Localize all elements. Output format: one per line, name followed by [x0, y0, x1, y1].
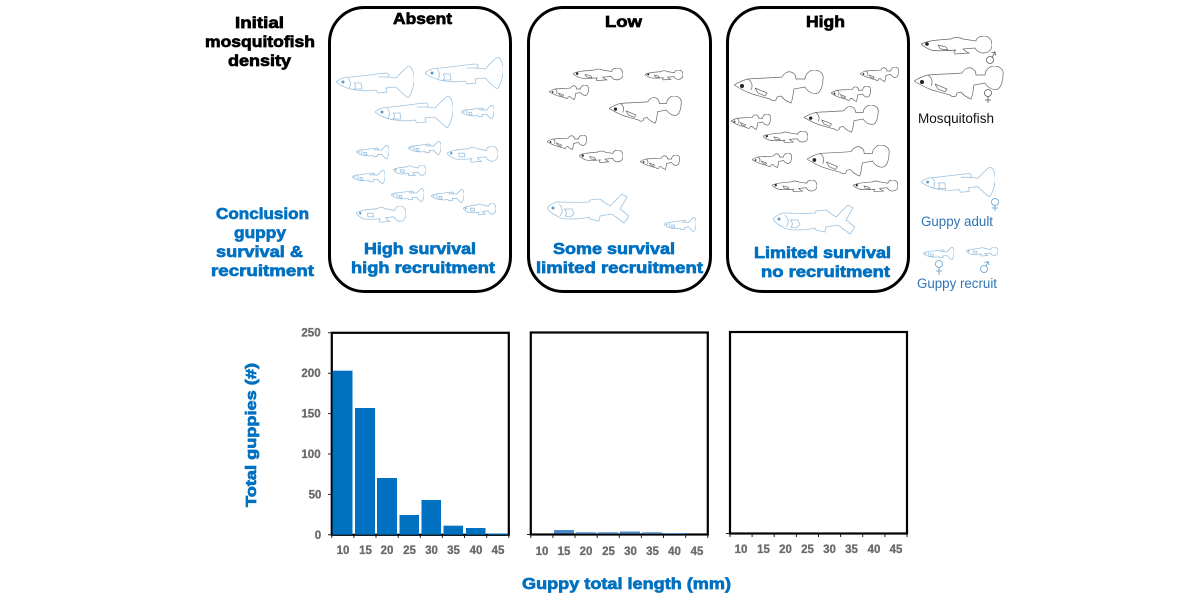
mosquitofish school: high [731, 67, 899, 192]
x labels: absent: 45 [492, 545, 505, 557]
x labels: absent: 40 [470, 545, 482, 557]
x labels: high: 45 [890, 544, 903, 556]
conclusion: limited survival: no recruitment [761, 264, 891, 281]
legend: mosquitofish [914, 36, 1003, 126]
panel title: Absent: Absent [393, 11, 453, 28]
mosquitofish school: low [547, 68, 683, 170]
bars: absent [332, 371, 508, 535]
conclusion: some survival [536, 241, 704, 277]
legend: guppy adult [921, 167, 998, 229]
y axis labels: 50 [309, 490, 321, 502]
guppy: high [773, 205, 855, 234]
x labels: high: 10 [735, 544, 747, 556]
y axis labels: 0 [315, 530, 321, 542]
conclusion: limited survival: Limited survival [754, 245, 891, 262]
axis ticks: high [726, 534, 907, 537]
legend: guppy recruit [917, 247, 998, 291]
x labels: high: 30 [823, 544, 836, 556]
heading: initial mosquitofish density: density [228, 53, 291, 70]
x labels: low: 10 [536, 546, 548, 558]
x labels: high [735, 544, 903, 556]
panel: absent [330, 8, 510, 292]
x labels: absent: 15 [359, 545, 372, 557]
y axis labels [301, 328, 321, 542]
x labels: absent: 20 [381, 545, 393, 557]
axis ticks: low [527, 534, 708, 538]
y axis title: Total guppies (#) [243, 363, 260, 507]
x labels: absent: 35 [447, 545, 460, 557]
bars: low [554, 530, 685, 534]
x labels: low: 35 [646, 546, 659, 558]
x axis title: Guppy total length (mm) [522, 576, 731, 593]
bar chart: low [527, 332, 708, 558]
heading: conclusion guppy survival and recruitment: recruitment [211, 263, 315, 280]
x labels: absent: 25 [403, 545, 416, 557]
heading: initial mosquitofish density [205, 15, 315, 70]
conclusion: limited survival [754, 245, 891, 281]
x labels: high: 15 [757, 544, 770, 556]
x labels: high: 35 [845, 544, 858, 556]
legend: guppy recruit: Guppy recruit [917, 276, 997, 291]
heading: initial mosquitofish density: mosquitofish [205, 34, 315, 51]
y axis labels: 200 [301, 368, 321, 380]
panel: high [728, 8, 908, 292]
heading: conclusion guppy survival and recruitment: guppy [234, 225, 286, 242]
x labels: high: 40 [868, 544, 880, 556]
conclusion: some survival: Some survival [553, 241, 675, 258]
y axis labels: 250 [301, 328, 321, 340]
y axis labels: 150 [301, 408, 321, 420]
panel title: High: High [806, 14, 845, 31]
x labels: low: 30 [624, 546, 637, 558]
heading: conclusion guppy survival and recruitment: survival & [216, 244, 304, 261]
x labels: high: 20 [779, 544, 792, 556]
axis ticks: absent [328, 333, 509, 538]
guppy school: absent [336, 57, 503, 222]
x labels: absent: 10 [337, 545, 349, 557]
x labels: low: 40 [668, 546, 681, 558]
x labels: absent [337, 545, 505, 557]
legend: guppy adult: Guppy adult [921, 214, 993, 229]
x labels: high: 25 [801, 544, 814, 556]
y axis labels: 100 [301, 449, 321, 461]
bar chart: absent [328, 333, 509, 557]
x labels: absent: 30 [425, 545, 438, 557]
conclusion: high survival [351, 241, 496, 277]
x labels: low: 20 [580, 546, 592, 558]
x labels: low: 45 [691, 546, 704, 558]
heading: conclusion guppy survival and recruitment: Conclusion [216, 206, 309, 223]
conclusion: high survival: high recruitment [351, 260, 496, 277]
x labels: low: 15 [558, 546, 571, 558]
heading: conclusion guppy survival and recruitment [211, 206, 315, 280]
conclusion: some survival: limited recruitment [536, 260, 704, 277]
legend: mosquitofish: Mosquitofish [918, 111, 994, 126]
x labels: low: 25 [602, 546, 615, 558]
heading: initial mosquitofish density: Initial [235, 15, 284, 32]
conclusion: high survival: High survival [364, 241, 476, 258]
bar chart: high [726, 332, 907, 556]
panel: low [528, 8, 710, 292]
panel title: Low: Low [605, 14, 643, 31]
guppies: low [547, 194, 696, 232]
x labels: low [536, 546, 704, 558]
